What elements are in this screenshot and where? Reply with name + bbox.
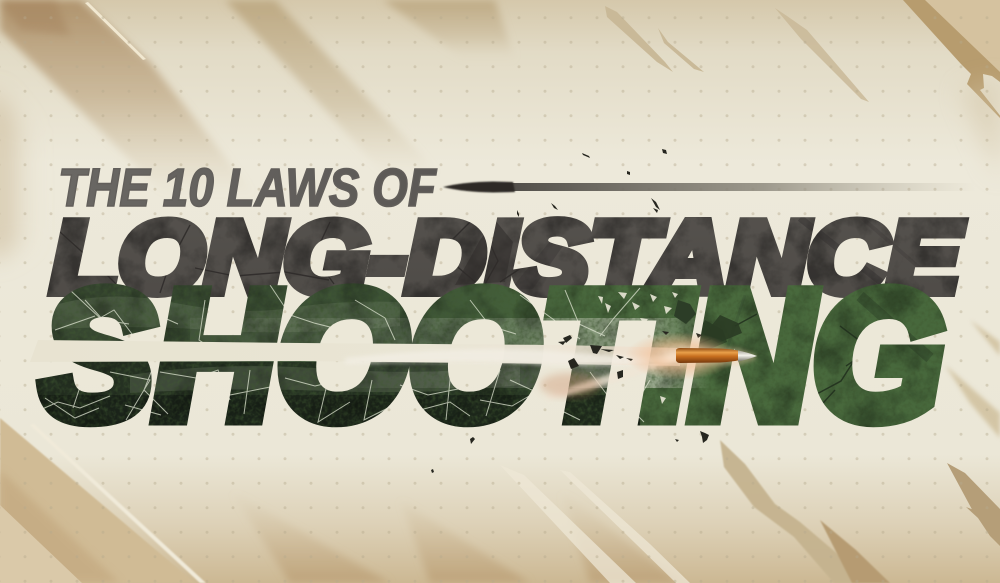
heading: shooting: SHOOTING: [41, 253, 944, 457]
scuff: top centre bands: [225, 0, 869, 175]
smoke wake behind bullet: [345, 349, 685, 400]
heading: long-distance: LONG-DISTANCE: [51, 202, 963, 314]
scuff: top-left corner: [0, 0, 255, 260]
heading: the 10 laws of: THE 10 LAWS OF: [58, 158, 438, 218]
scuff: lower-centre bands: [230, 440, 890, 583]
top bullet with trail: [443, 182, 975, 192]
debris: dark shards: [431, 149, 742, 473]
scuff: lower-left wedge: [0, 418, 206, 583]
bullet in flight: [625, 332, 757, 380]
scuff: lower-right flame marks: [945, 320, 1000, 555]
bullet slash cut through shooting: [30, 340, 680, 366]
scuff: top-right corner: [903, 0, 1000, 180]
